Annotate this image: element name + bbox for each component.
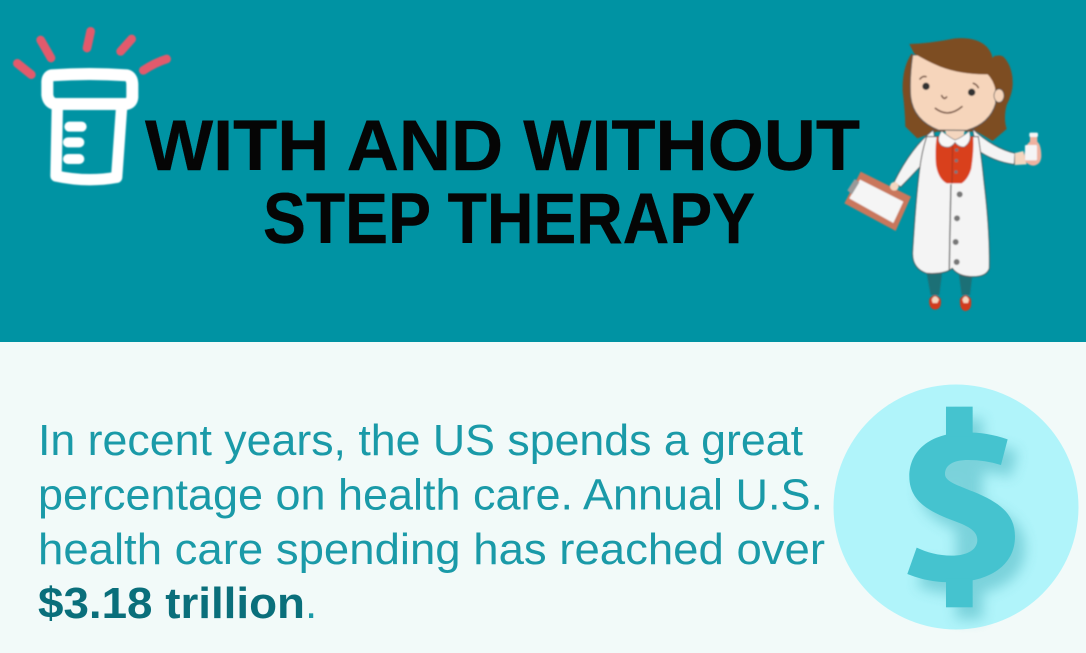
panel: intro background	[0, 342, 1086, 653]
hair right	[987, 55, 1013, 105]
icon: pill bottle	[17, 31, 167, 180]
panel: header	[0, 0, 1086, 342]
coat buttons	[953, 148, 963, 265]
hair fringe	[909, 38, 993, 74]
coat	[913, 137, 989, 277]
right hand and bottle	[1015, 151, 1027, 165]
title line 2: STEP THERAPY	[263, 180, 755, 259]
title line 1: WITH AND WITHOUT	[145, 107, 860, 186]
coat seam	[949, 184, 951, 270]
hair back	[903, 53, 1013, 141]
left hand	[890, 182, 899, 191]
title	[145, 107, 860, 259]
face	[910, 55, 996, 130]
eyes	[922, 83, 930, 90]
text line 1: In recent years, the US spends a great	[38, 416, 803, 465]
icon: dollar coin	[834, 384, 1078, 630]
text line 2: percentage on health care. Annual U.S.	[38, 470, 823, 520]
clipboard	[844, 172, 911, 231]
facial lines	[920, 76, 978, 113]
left arm	[894, 130, 937, 187]
vest	[935, 137, 973, 183]
icon: doctor character	[844, 38, 1041, 311]
shoes	[929, 295, 971, 311]
neck	[945, 128, 965, 140]
legs	[927, 273, 972, 295]
text line 4: $3.18 trillion.	[38, 579, 317, 628]
vest seam	[950, 142, 954, 184]
right arm	[973, 129, 1015, 164]
intro paragraph	[38, 416, 825, 628]
text line 3: health care spending has reached over	[38, 525, 825, 574]
collar	[938, 131, 970, 147]
ear	[994, 89, 1004, 102]
